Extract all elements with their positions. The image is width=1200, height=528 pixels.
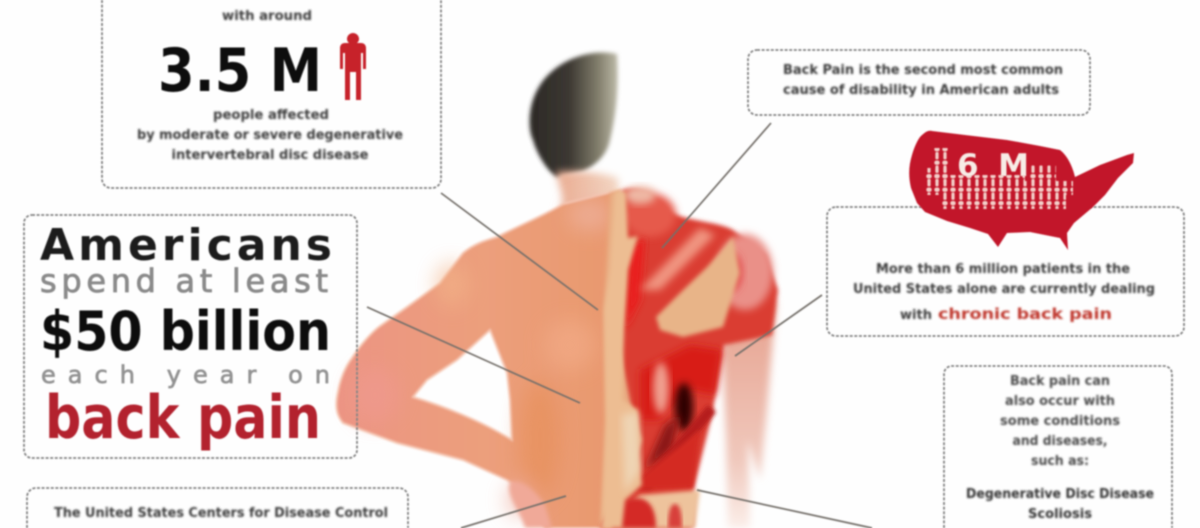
panel: 50 billion dollar cost [24, 215, 357, 458]
figure: skin highlights [351, 199, 612, 518]
figure: muscle mass [600, 186, 778, 528]
text: conditions list: Scoliosis [1028, 507, 1092, 522]
text: each year on: each year on [41, 361, 330, 389]
text: conditions list: such as: [1031, 454, 1089, 469]
leader line: CDC box [461, 496, 566, 528]
leader line: disc disease box [441, 193, 598, 310]
text: people affected: intervertebral disc disease [172, 148, 369, 163]
text: conditions list: Back pain can [1010, 374, 1110, 389]
panel: related conditions [944, 366, 1172, 528]
text: chronic pain note: with [900, 308, 932, 323]
icon: people grid on map [925, 148, 1073, 209]
leader line: disability box [662, 123, 771, 248]
text: conditions list: and diseases, [1012, 434, 1108, 449]
text: with around: with around [222, 9, 312, 24]
text: disability note [783, 63, 1063, 98]
text: chronic pain note: United States alone are currently dealing [853, 282, 1155, 297]
stat: 6 M: 6 M [957, 148, 1029, 184]
text: disability note: Back Pain is the second most common [783, 63, 1063, 78]
text: chronic pain note: chronic back pain [938, 305, 1112, 323]
leader lines [367, 123, 872, 528]
text: chronic pain note: More than 6 million patients in the [876, 262, 1130, 277]
figure: man's back with exposed muscles [336, 52, 778, 528]
text: spend at least: spend at least [40, 262, 328, 300]
stat: 3.5 M: 3.5 M [158, 36, 322, 106]
stat: $50 billion: $50 billion [40, 300, 331, 363]
figure: pale lumbar area [622, 412, 640, 492]
text: conditions list [966, 374, 1154, 522]
leader line: chronic pain box [735, 295, 822, 356]
figure: spine band [602, 190, 642, 528]
text: chronic pain note [853, 262, 1155, 323]
leader line: cost box [367, 307, 580, 403]
figure: hair and head [530, 52, 618, 177]
figure: neck [556, 171, 620, 215]
text: people affected: people affected [213, 108, 329, 123]
icon: red person [340, 33, 366, 100]
figure: far arm [722, 300, 776, 528]
text: conditions list: some conditions [1000, 414, 1120, 429]
figure: hand at the lower back [509, 481, 552, 528]
heading: Americans: Americans [40, 220, 332, 271]
icon: US map with 6 M [909, 131, 1134, 250]
panel: CDC note [27, 488, 408, 528]
text: disability note: cause of disability in American adults [783, 83, 1059, 98]
text: conditions list: also occur with [1005, 394, 1115, 409]
leader line: conditions box [697, 490, 872, 528]
text: CDC note: The United States Centers for Disease Control [54, 506, 388, 521]
panel: chronic back pain [827, 207, 1184, 336]
panel: 3.5 million people affected [102, 0, 441, 188]
text: people affected: by moderate or severe degenerative [137, 128, 403, 143]
stat: back pain: back pain [45, 383, 321, 453]
panel: second most common cause [748, 50, 1090, 115]
text: people affected [137, 108, 403, 163]
text: conditions list: Degenerative Disc Disease [966, 487, 1154, 502]
figure: skin of back and bent arm [336, 190, 628, 528]
figure: tan underlay along the spine [600, 192, 690, 528]
